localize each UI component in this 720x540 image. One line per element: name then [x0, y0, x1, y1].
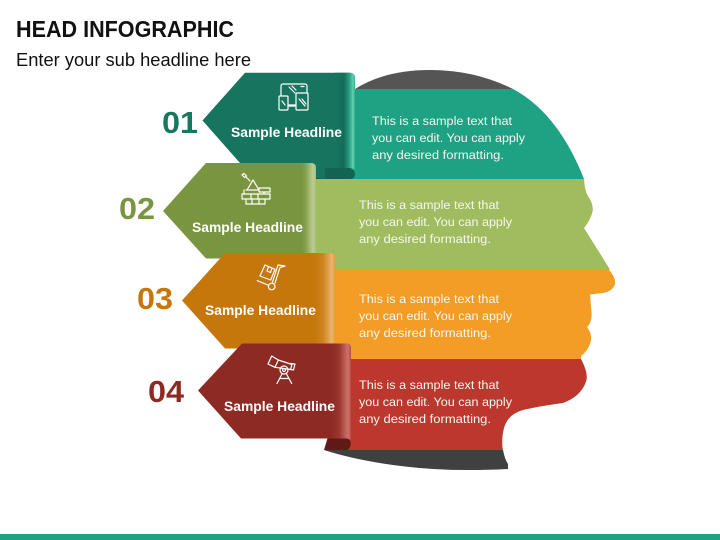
head silhouette [300, 70, 615, 470]
headline 2: Sample Headline [192, 220, 303, 235]
icon: hand truck [257, 265, 285, 290]
ribbon 1 sheen [335, 73, 355, 171]
headline 3: Sample Headline [205, 303, 316, 318]
title: HEAD INFOGRAPHIC [16, 16, 234, 42]
ribbon 4 fold [324, 430, 351, 450]
ribbon 4 sheen [331, 344, 351, 444]
number 03: 03 [137, 281, 173, 316]
band 1 text: you can edit. You can apply [372, 131, 526, 145]
band 1 text: any desired formatting. [372, 148, 504, 162]
icon: telescope [268, 356, 295, 384]
ribbon 2 sheen [301, 163, 316, 269]
subtitle: Enter your sub headline here [16, 50, 251, 70]
band 4 text [359, 378, 513, 426]
band 4 text: any desired formatting. [359, 412, 491, 426]
head band 3 orange [320, 269, 615, 360]
band 1 text [372, 114, 526, 162]
headline 1: Sample Headline [231, 125, 342, 140]
head band 4 red [330, 359, 587, 450]
head band 1 teal [340, 89, 584, 179]
ribbon 4 arrow [198, 344, 351, 444]
ribbon 3 [137, 253, 335, 360]
band 2 text: This is a sample text that [359, 198, 500, 212]
head band 2 green [300, 179, 610, 270]
number 01: 01 [162, 105, 198, 140]
icon: devices [279, 84, 308, 110]
headline 4: Sample Headline [224, 399, 335, 414]
ribbon 3 arrow [182, 253, 335, 360]
ribbon 2 [119, 163, 316, 269]
ribbon 2 arrow [163, 163, 316, 269]
head top cap [355, 70, 513, 89]
footer bar [0, 534, 720, 540]
ribbon 4 [148, 344, 351, 450]
ribbon 3 sheen [315, 253, 335, 360]
ribbon 1 arrow [202, 73, 355, 179]
band 1 text: This is a sample text that [372, 114, 513, 128]
band 3 text [359, 292, 513, 340]
number 02: 02 [119, 191, 155, 226]
band 4 text: you can edit. You can apply [359, 395, 513, 409]
band 2 text [359, 198, 513, 246]
ribbon 1 [162, 73, 355, 179]
band 3 text: you can edit. You can apply [359, 309, 513, 323]
icon: bricks and trowel [242, 174, 270, 204]
band 2 text: any desired formatting. [359, 232, 491, 246]
band 3 text: any desired formatting. [359, 326, 491, 340]
band 2 text: you can edit. You can apply [359, 215, 513, 229]
head neck base [324, 450, 508, 470]
ribbon 1 fold [300, 160, 355, 179]
band 3 text: This is a sample text that [359, 292, 500, 306]
number 04: 04 [148, 374, 185, 409]
band 4 text: This is a sample text that [359, 378, 500, 392]
